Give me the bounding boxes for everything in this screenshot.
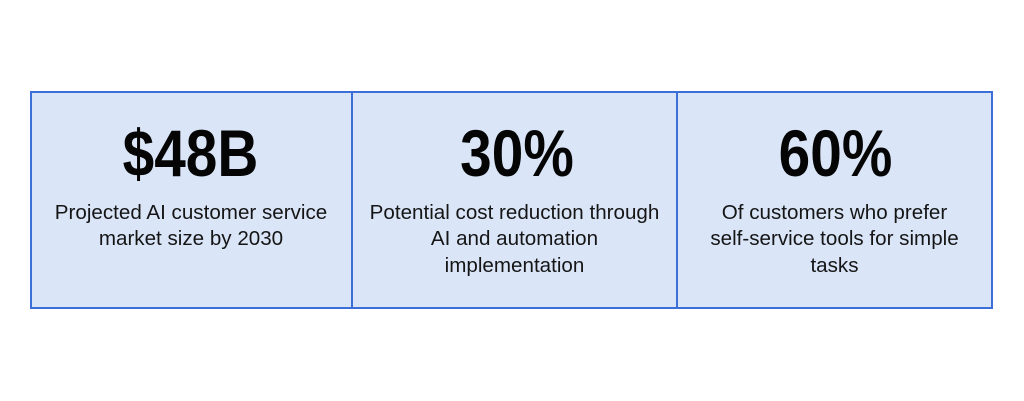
description: self-service preference: Of customers who prefer	[722, 200, 947, 224]
statistic: 60%: 60%	[779, 116, 892, 190]
description: market size	[55, 200, 327, 250]
stats table	[30, 91, 993, 309]
statistic: $48B: $48B	[123, 116, 258, 190]
panel: market size	[30, 90, 353, 308]
description: self-service preference: tasks	[810, 254, 859, 277]
panel: self-service preference	[676, 90, 993, 308]
description: self-service preference	[710, 200, 959, 277]
statistic: 30%: 30%	[460, 116, 574, 190]
panel: cost reduction	[351, 90, 678, 308]
description: market size: market size by 2030	[99, 227, 283, 250]
description: cost reduction: implementation	[445, 254, 584, 277]
description: self-service preference: self-service tools for simple	[710, 227, 959, 250]
description: cost reduction: Potential cost reduction through	[370, 200, 659, 224]
description: market size: Projected AI customer service	[55, 200, 327, 224]
description: cost reduction: AI and automation	[431, 227, 598, 250]
description: cost reduction	[370, 200, 659, 277]
